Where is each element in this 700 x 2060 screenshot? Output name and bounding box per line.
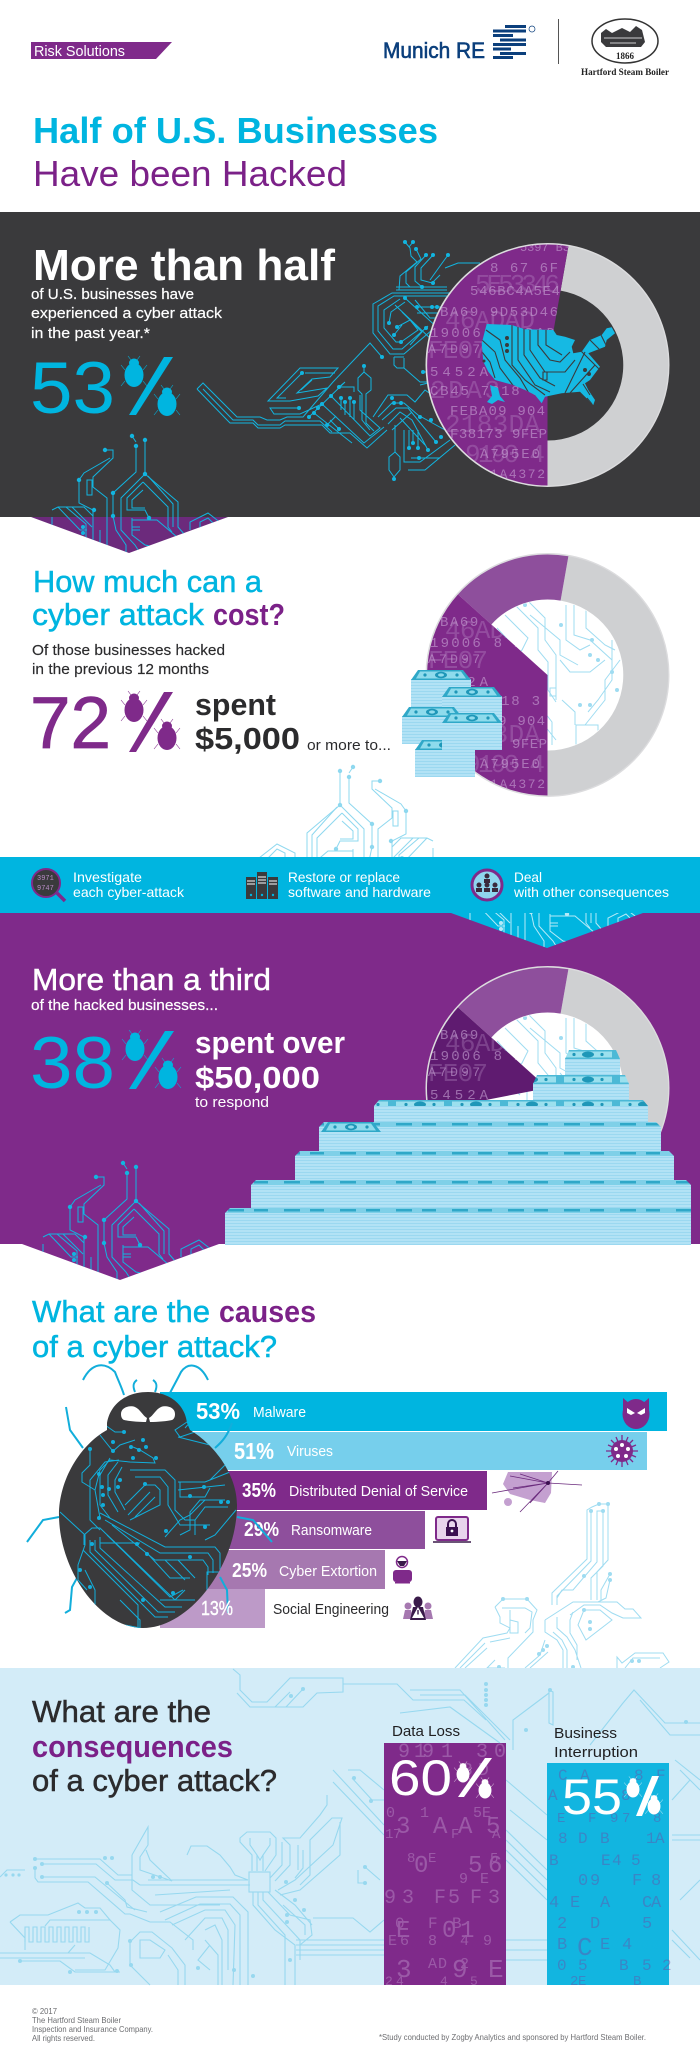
bar: business interruption 55 percent: 2D5: [557, 1915, 652, 1934]
bar: business interruption 55 percent: 09F8: [578, 1872, 661, 1891]
bar: business interruption 55 percent: BE45: [549, 1852, 641, 1870]
stat: 38 percent: [30, 1023, 181, 1104]
icon: servers: [246, 872, 278, 899]
footer: copyright: © 2017: [32, 2006, 57, 2016]
text: deal with other consequences: [513, 869, 669, 900]
text: description: experienced a cyber attack: [31, 305, 223, 322]
stat: 53 percent: 53: [30, 348, 115, 429]
bar: distributed denial of service 35 percent: 35%: [242, 1480, 276, 1502]
circuit: main trace nodes: [297, 240, 450, 481]
footer: copyright: Inspection and Insurance Company.: [32, 2024, 153, 2034]
circuit: background traces: [0, 1669, 700, 1985]
bar: business interruption 55 percent: 55: [562, 1769, 622, 1825]
bar: business interruption 55 percent: BE4: [557, 1936, 632, 1955]
bar: data loss 60 percent: 17FA: [385, 1827, 501, 1843]
bar: data loss 60 percent: Data Loss: [392, 1723, 460, 1740]
icon: social engineering people: [403, 1596, 433, 1620]
heading: cost question: cyber attack: [32, 597, 205, 632]
bar: viruses 51 percent: Viruses: [287, 1443, 333, 1460]
bar: business interruption 55 percent: A8: [548, 1787, 631, 1805]
bar: data loss 60 percent: 2445: [385, 1974, 478, 1989]
heading: causes: of a cyber attack?: [32, 1329, 277, 1364]
bar: data loss 60 percent: [384, 1723, 506, 1989]
text: deal with other consequences: Deal: [514, 869, 542, 885]
bar: business interruption 55 percent: Business: [554, 1725, 617, 1742]
bar: data loss 60 percent: 056: [414, 1853, 502, 1880]
bar: data loss 60 percent: 01 5E: [386, 1805, 491, 1822]
heading: consequences: What are the: [32, 1694, 211, 1729]
bar: business interruption 55 percent: 8DB1A: [558, 1830, 665, 1848]
donut chart: 72 percent: [426, 551, 668, 796]
text: spent 5000: $5,000: [195, 721, 300, 756]
donut chart: 38 percent: [426, 966, 670, 1132]
icon: money pyramid: [225, 1050, 691, 1245]
text: restore or replace: software and hardware: [288, 884, 431, 900]
bar: ransomware 29 percent: [160, 1511, 425, 1549]
text: spent over 50000: to respond: [195, 1094, 269, 1111]
chevron: purple pointer with circuit: [22, 1161, 219, 1280]
heading: consequences: [32, 1694, 277, 1798]
icon: magnifier: 9747: [37, 885, 54, 893]
bug legs: [27, 1365, 272, 1613]
bar: data loss 60 percent: 3D: [462, 1761, 489, 1781]
heading: cost question: How much can a: [33, 564, 263, 599]
bar: business interruption 55 percent: 05B52: [557, 1957, 672, 1975]
text: those businesses hacked: in the previous 12 months: [32, 661, 209, 678]
bar: data loss 60 percent: E6849: [388, 1933, 492, 1950]
bar: data loss 60 percent: 60: [389, 1750, 452, 1806]
logo: Hartford Steam Boiler: Hartford Steam Boiler: [581, 67, 669, 77]
text: investigate: [73, 869, 185, 900]
text: spent over 50000: [195, 1025, 345, 1111]
logo: Munich RE: [383, 25, 535, 63]
bar: business interruption 55 percent: Interruption: [554, 1744, 638, 1761]
icon: laptop with lock: [433, 1517, 471, 1542]
circuit: lower right of causes: [455, 1502, 669, 1669]
footer: copyright: All rights reserved.: [32, 2033, 95, 2043]
footer: copyright: [32, 2006, 153, 2043]
text: spent over 50000: spent over: [195, 1025, 345, 1060]
tag: Risk Solutions: Risk Solutions: [34, 43, 125, 60]
bar: data loss 60 percent: 8 E 5: [407, 1851, 498, 1867]
stat label: 13 percent: 13%: [201, 1598, 233, 1620]
icon: devil: [622, 1398, 650, 1429]
title: [33, 110, 438, 194]
text: those businesses hacked: [32, 642, 225, 678]
heading: more than half: More than half: [33, 241, 335, 290]
stat: 53 percent: [30, 348, 180, 429]
title: Have been Hacked: [33, 153, 347, 194]
text: description: of U.S. businesses have: [31, 286, 194, 303]
heading: consequences: consequences: [32, 1729, 233, 1764]
circuit: main traces: [197, 242, 480, 477]
text: description: in the past year.*: [31, 325, 150, 342]
icon: magnifier: [32, 869, 65, 901]
bar: data loss 60 percent: E01: [396, 1918, 474, 1945]
bar: data loss 60 percent: 39E: [396, 1955, 504, 1985]
map: United States: [482, 324, 615, 405]
logo: Hartford Steam Boiler: 1866: [616, 51, 634, 61]
bar: social engineering 13 percent: [160, 1589, 265, 1628]
tag: Risk Solutions: [31, 42, 172, 60]
bar: malware 53 percent: 53%: [196, 1398, 240, 1424]
logo: Hartford Steam Boiler: [581, 19, 669, 77]
bar: cyber extortion 25 percent: [160, 1550, 385, 1589]
bar: data loss 60 percent: 3AA5: [396, 1814, 500, 1841]
bar: cyber extortion 25 percent: 25%: [232, 1560, 267, 1582]
heading: cost question: cost?: [213, 597, 285, 632]
panel: more than a third: [0, 913, 700, 1245]
text: of the hacked businesses: of the hacked businesses...: [31, 997, 218, 1014]
heading: more than a third: More than a third: [32, 962, 271, 997]
heading: cost question: [32, 564, 285, 632]
section: how much can a cyber attack cost: [30, 551, 668, 884]
stat: 38 percent: 38: [30, 1023, 115, 1104]
heading: causes: [32, 1294, 316, 1364]
text: spent 5000: or more to...: [307, 737, 391, 754]
bar: business interruption 55 percent: CA8F: [558, 1767, 666, 1785]
text: spent 5000: [195, 687, 391, 756]
text: spent over 50000: $50,000: [195, 1060, 320, 1095]
bar: business interruption 55 percent: C: [577, 1933, 593, 1963]
logo: Munich RE: Munich RE: [383, 38, 485, 63]
bar: viruses 51 percent: 51%: [234, 1438, 274, 1464]
bar: viruses 51 percent: [160, 1432, 647, 1470]
footer: study note: *Study conducted by Zogby Analytics and sponsored by Hartford Steam Boiler.: [379, 2032, 646, 2042]
bar chart: causes: [160, 1392, 667, 1628]
icon: map with spider: [492, 1471, 582, 1512]
text: investigate: Investigate: [73, 869, 142, 885]
text: restore or replace: Restore or replace: [288, 869, 400, 885]
panel: consequences: [0, 1668, 700, 1990]
icon: money stacks: [402, 670, 502, 777]
bar: data loss 60 percent: AD2: [428, 1956, 469, 1973]
text: deal with other consequences: with other consequences: [513, 884, 669, 900]
bar: business interruption 55 percent: 2EB: [570, 1974, 641, 1990]
bug eyes: [121, 1406, 175, 1422]
bar: data loss 60 percent: 9E: [459, 1871, 489, 1888]
bar: cyber extortion 25 percent: Cyber Extortion: [279, 1563, 377, 1580]
icon: magnifier: 3971: [37, 875, 54, 883]
heading: causes: causes: [219, 1294, 316, 1329]
bar: data loss 60 percent: 0FB: [395, 1915, 462, 1933]
bar: business interruption 55 percent: EF97 8: [557, 1811, 661, 1827]
stat: 72 percent: 72: [30, 683, 111, 764]
bug circuit: [60, 1420, 236, 1628]
text: restore or replace: [288, 869, 431, 900]
chevron: purple pointer: [31, 517, 228, 553]
text: investigate: each cyber-attack: [73, 884, 185, 900]
bar: data loss 60 percent: 93F5F3: [384, 1887, 500, 1910]
heading: causes: What are the: [32, 1294, 210, 1329]
band: cost categories: [0, 857, 700, 913]
stat: 72 percent: [30, 683, 180, 764]
circuit: chevron traces: [52, 434, 226, 553]
bar: ransomware 29 percent: 29%: [244, 1519, 279, 1541]
text: those businesses hacked: Of those businesses hacked: [32, 642, 225, 659]
header: [31, 19, 669, 77]
heading: consequences: of a cyber attack?: [32, 1763, 277, 1798]
footer: copyright: The Hartford Steam Boiler: [32, 2015, 121, 2025]
icon: people network: [472, 870, 502, 900]
illustration: circuit bug: [27, 1365, 272, 1628]
bar: ransomware 29 percent: Ransomware: [291, 1522, 372, 1539]
text: description: [31, 286, 223, 342]
bar: business interruption 55 percent: [547, 1725, 672, 1990]
circuit: above blue band: [260, 764, 434, 857]
bug body: [59, 1392, 237, 1628]
title: Half of U.S. Businesses: [33, 110, 438, 151]
icon: hacker: [393, 1556, 412, 1584]
icon: virus: [606, 1435, 638, 1467]
logo divider: [558, 19, 559, 64]
bar: malware 53 percent: [160, 1392, 667, 1431]
bar: business interruption 55 percent: 4EACA: [549, 1894, 662, 1913]
bar: data loss 60 percent: 919130: [398, 1741, 506, 1764]
donut chart: 53 percent: [426, 241, 668, 486]
bar: distributed denial of service 35 percent: [160, 1471, 487, 1510]
chevron: blue pointer: [451, 913, 643, 948]
text: spent 5000: spent: [195, 687, 276, 722]
bar: distributed denial of service 35 percent: Distributed Denial of Service: [289, 1483, 468, 1500]
label: social engineering: Social Engineering: [273, 1601, 389, 1618]
panel: more than half: [0, 212, 700, 553]
bar: malware 53 percent: Malware: [253, 1404, 306, 1421]
